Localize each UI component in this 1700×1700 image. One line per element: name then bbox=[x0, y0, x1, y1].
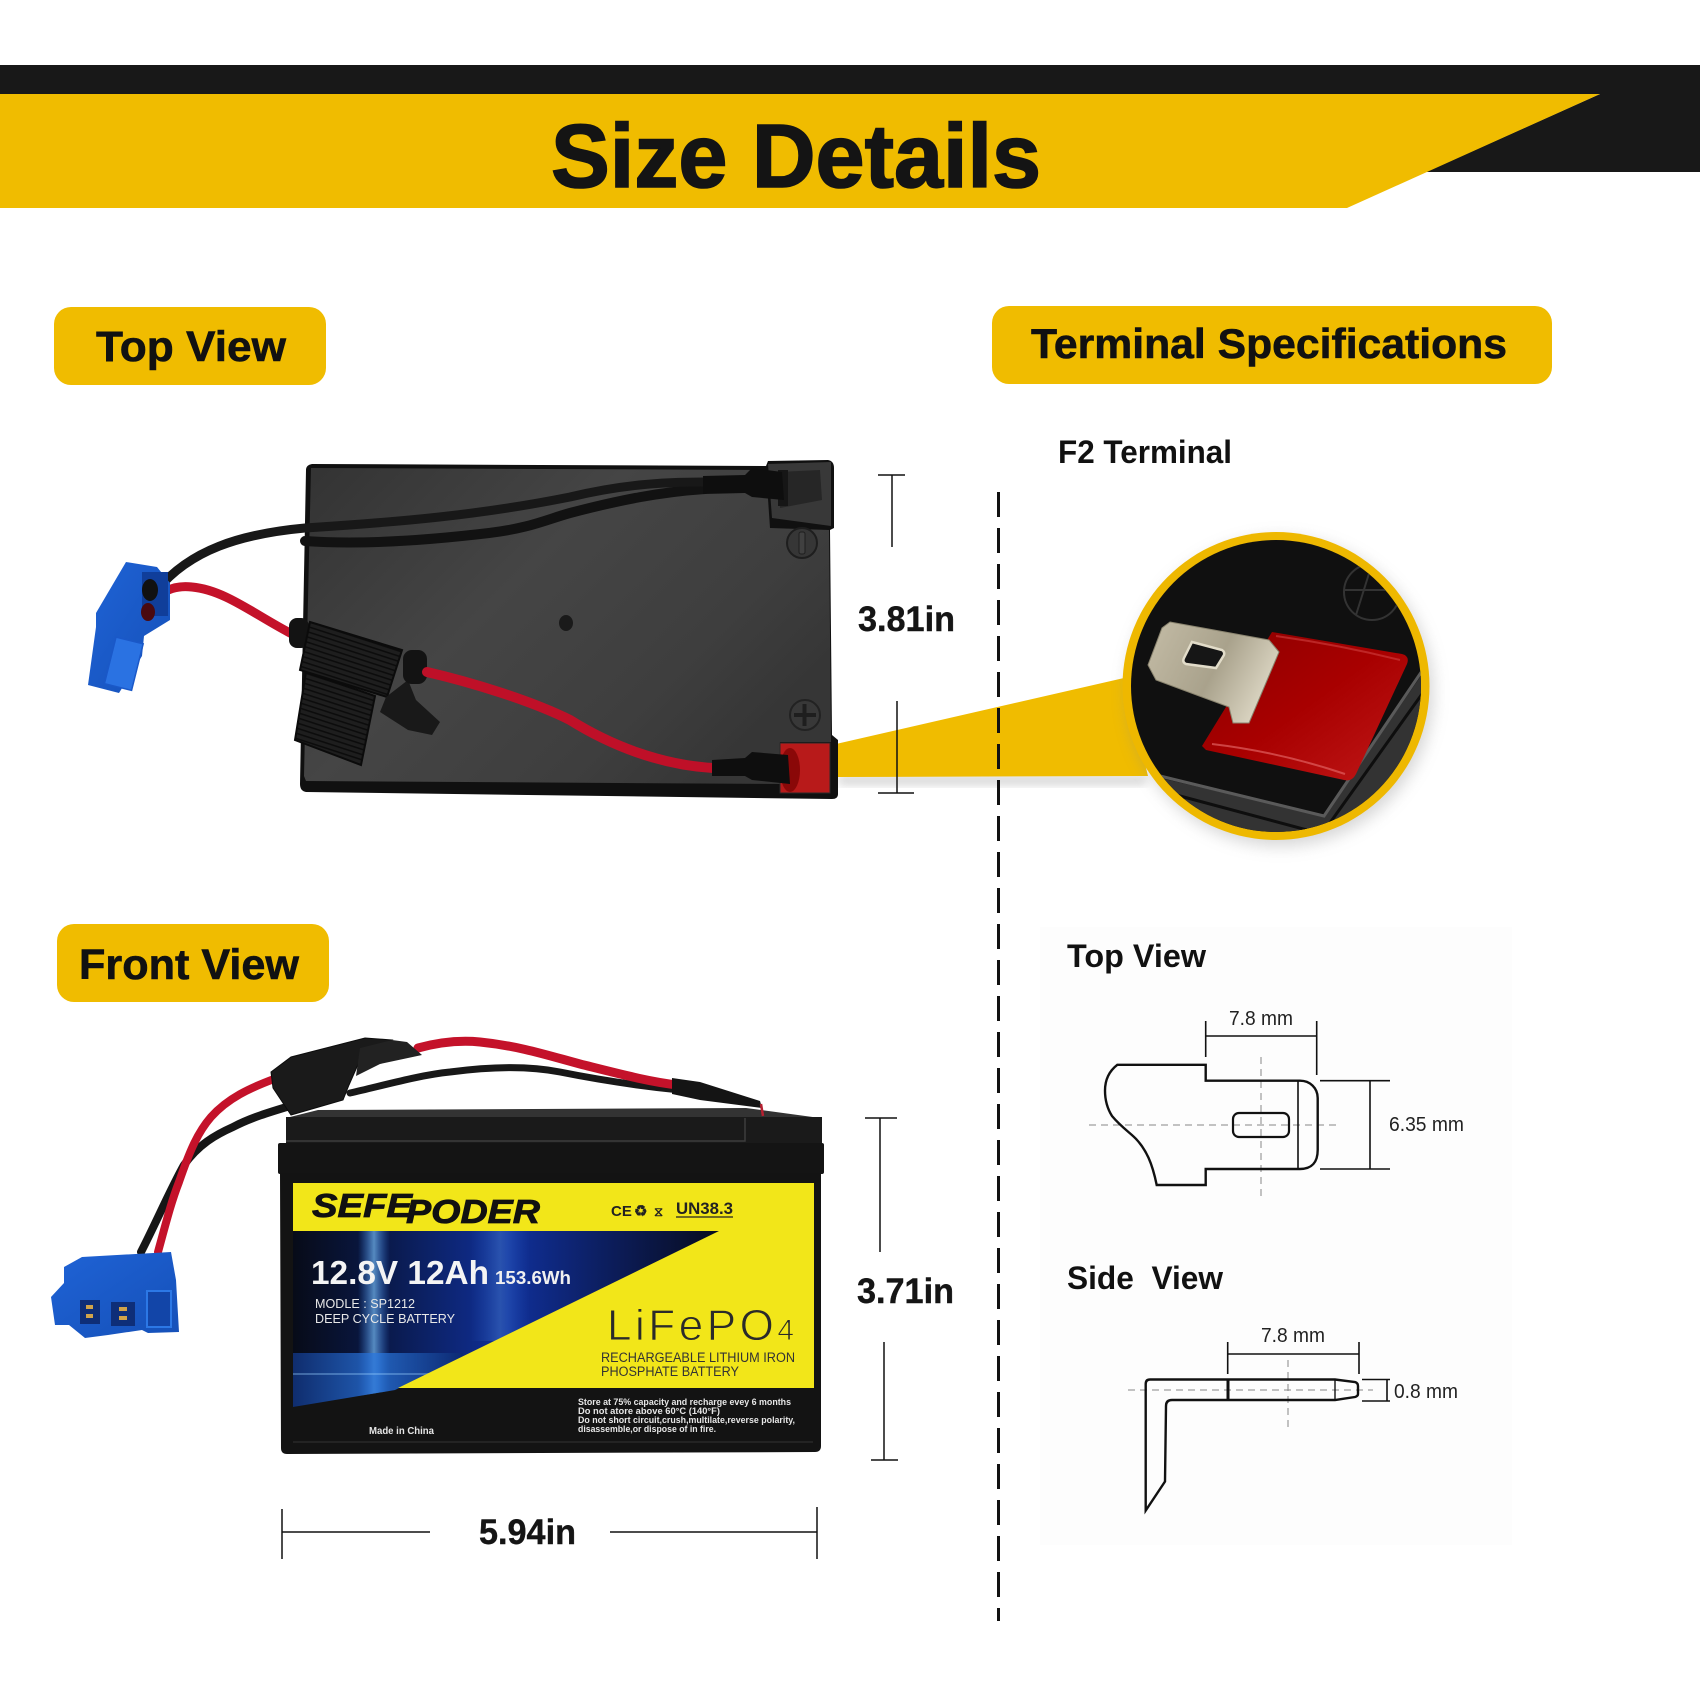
circle shadow bbox=[1127, 538, 1433, 846]
vertical dashed divider bbox=[997, 492, 1000, 1621]
side fold marks bbox=[1226, 1380, 1230, 1400]
voltage capacity: 12.8V 12Ah bbox=[311, 1254, 489, 1291]
red terminal patch bbox=[1202, 632, 1408, 780]
brand logo: SEFE bbox=[312, 1187, 413, 1224]
side centre lines bbox=[1128, 1360, 1373, 1430]
dimension: 5.94in: 5.94in bbox=[479, 1513, 576, 1552]
front blue connector bbox=[51, 1252, 179, 1338]
tab slot bbox=[1183, 642, 1224, 668]
minus mark bbox=[787, 528, 817, 558]
length dimension 7.8 mm bbox=[1228, 1325, 1359, 1374]
embossed plus logo bbox=[1344, 564, 1400, 620]
phosphate text: PHOSPHATE BATTERY bbox=[601, 1364, 739, 1379]
upper lid bbox=[286, 1117, 822, 1144]
battery case bbox=[300, 460, 838, 799]
terminal diagrams background panel bbox=[1040, 927, 1512, 1545]
front wires bbox=[141, 1041, 680, 1252]
certification marks bbox=[611, 1203, 663, 1220]
watt hours: 153.6Wh bbox=[495, 1268, 571, 1288]
storage warnings: Store at 75% capacity and recharge evey 6 months bbox=[578, 1397, 791, 1407]
width dimension 7.8 mm bbox=[1206, 1008, 1317, 1075]
negative terminal corner bbox=[768, 462, 831, 526]
yellow brand band bbox=[293, 1183, 814, 1231]
dimension: 3.81in: 3.81in bbox=[858, 600, 955, 639]
heading: Top View: Top View bbox=[96, 323, 287, 371]
front fuse holder bbox=[271, 1038, 422, 1115]
brand logo bbox=[312, 1187, 540, 1230]
LiFePO4 text: LiFePO4 bbox=[607, 1301, 794, 1350]
terminal pin bbox=[761, 1104, 763, 1116]
fuse holder bbox=[289, 618, 440, 765]
fuse barrel left bbox=[289, 618, 309, 648]
made in china: Made in China bbox=[369, 1426, 434, 1437]
dark blue label area bbox=[293, 1231, 723, 1407]
header banner bbox=[0, 65, 1700, 208]
centre dimple bbox=[559, 615, 573, 631]
red wire to terminal bbox=[427, 672, 713, 768]
thickness dimension 0.8 mm: 0.8 mm bbox=[1394, 1381, 1458, 1403]
photo: battery front view bbox=[51, 1038, 824, 1454]
storage warnings bbox=[578, 1397, 795, 1434]
diagram title: Top View: Top View bbox=[1067, 938, 1206, 974]
certification marks: ⧖ bbox=[654, 1204, 663, 1219]
yellow lifepo4 panel bbox=[398, 1231, 814, 1388]
rechargeable text: RECHARGEABLE LITHIUM IRON bbox=[601, 1350, 795, 1365]
magnified terminal circle bbox=[1120, 530, 1450, 860]
fold line bbox=[1297, 1081, 1299, 1169]
lower lid bbox=[278, 1143, 824, 1174]
fuse upper block bbox=[300, 622, 402, 697]
tab outline bbox=[1105, 1065, 1318, 1185]
storage warnings: Do not atore above 60°C (140°F) bbox=[578, 1406, 720, 1416]
heading: Front View: Front View bbox=[79, 941, 300, 989]
lower case edge bbox=[1164, 676, 1421, 832]
height dimension 6.35 mm: 6.35 mm bbox=[1389, 1114, 1464, 1136]
fuse tab bbox=[380, 680, 440, 735]
model text: MODLE : SP1212 bbox=[315, 1296, 415, 1311]
diagram title: Side View: Side View bbox=[1067, 1260, 1223, 1296]
fuse barrel right bbox=[403, 650, 427, 684]
terminal top view drawing bbox=[1089, 1008, 1464, 1200]
dark interior bbox=[1131, 540, 1421, 832]
certification marks: ♻ bbox=[634, 1203, 647, 1220]
black banner band bbox=[0, 65, 1700, 172]
top surface bbox=[286, 1108, 820, 1118]
plus mark bbox=[790, 700, 820, 730]
centre lines bbox=[1089, 1057, 1338, 1200]
positive terminal red patch bbox=[780, 743, 830, 793]
heat shrink lead bbox=[672, 1078, 762, 1108]
case top surface bbox=[304, 468, 831, 784]
yellow ring bbox=[1122, 532, 1430, 840]
blue connector bbox=[88, 562, 170, 693]
yellow callout wedge bbox=[836, 678, 1148, 784]
heading: Front View bbox=[57, 924, 329, 1002]
certification marks: CE bbox=[611, 1203, 632, 1220]
blue floor bbox=[293, 1353, 463, 1407]
terminal side view drawing bbox=[1128, 1325, 1458, 1510]
UN38.3 mark: UN38.3 bbox=[676, 1199, 733, 1218]
battery body bbox=[280, 1173, 821, 1454]
deep cycle text: DEEP CYCLE BATTERY bbox=[315, 1311, 455, 1326]
negative lug bbox=[703, 468, 784, 500]
heading: Terminal Specifications bbox=[992, 306, 1552, 384]
label: F2 Terminal: F2 Terminal bbox=[1058, 434, 1232, 470]
metal tab bbox=[1148, 622, 1279, 723]
heading: Top View bbox=[54, 307, 326, 385]
black wires bbox=[157, 482, 705, 590]
red wire to fuse bbox=[144, 587, 292, 634]
yellow banner band bbox=[0, 94, 1600, 208]
heading: Terminal Specifications: Terminal Specifications bbox=[1031, 320, 1507, 367]
slot bbox=[1233, 1113, 1289, 1137]
fuse lower block bbox=[295, 672, 375, 765]
title: Size Details bbox=[551, 107, 1041, 207]
dimension: 3.71in: 3.71in bbox=[857, 1272, 954, 1311]
side profile bbox=[1146, 1380, 1358, 1510]
length dimension 7.8 mm: 7.8 mm bbox=[1261, 1325, 1325, 1347]
thickness dimension 0.8 mm bbox=[1362, 1380, 1458, 1403]
storage warnings: disassemble,or dispose of in fire. bbox=[578, 1424, 716, 1434]
light streak bbox=[359, 1231, 389, 1396]
photo: battery top view bbox=[88, 460, 838, 799]
brand logo: PODER bbox=[406, 1193, 540, 1230]
positive lug bbox=[712, 752, 790, 784]
storage warnings: Do not short circuit,crush,multilate,reverse polarity, bbox=[578, 1415, 795, 1425]
width dimension 7.8 mm: 7.8 mm bbox=[1229, 1008, 1293, 1030]
